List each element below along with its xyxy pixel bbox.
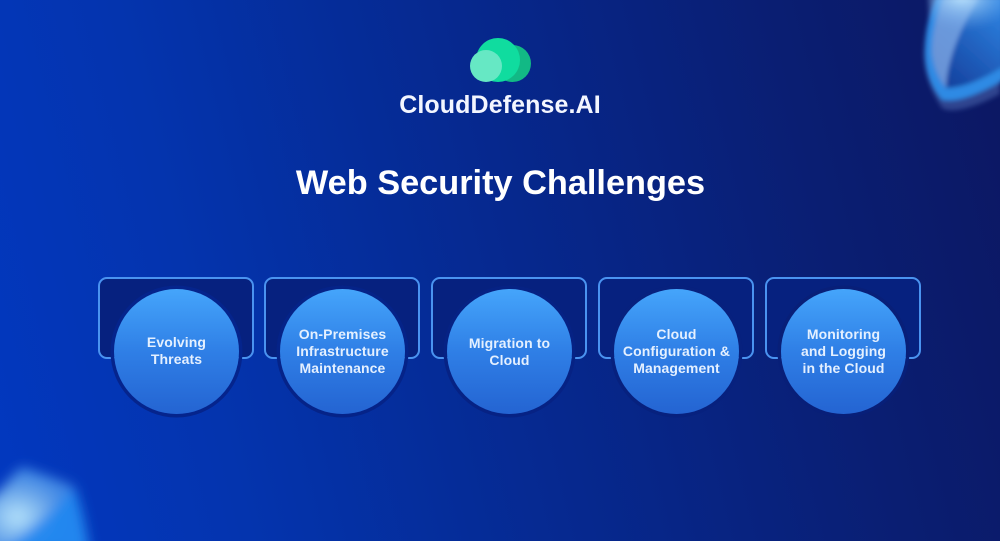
circle label [781,289,906,414]
circle label: Migration to [469,334,550,350]
icon: shield decoration top right [921,0,1000,112]
circle label [114,289,239,414]
icon: blurred shield decoration bottom left [0,462,96,541]
icon: green cloud [470,38,531,82]
logo wordmark: CloudDefense.AI [399,91,601,119]
circle label: in the Cloud [802,360,885,376]
circle label: Evolving [147,334,206,350]
title: Web Security Challenges [296,164,705,202]
circle label: Threats [151,350,202,366]
circle label [614,289,739,414]
circle label: Cloud [656,326,697,342]
circle label: Cloud [489,352,530,368]
card frame [264,277,420,359]
circle label: Maintenance [300,360,385,376]
logo: CloudDefense.AI [399,38,601,119]
circle label: On-Premises [299,326,386,342]
card frame [598,277,754,359]
circle label: Configuration & [623,343,730,359]
circle label: and Logging [801,343,886,359]
circle label [280,289,405,414]
circle label: Monitoring [807,326,880,342]
circle label: Infrastructure [296,343,389,359]
card frame [431,277,587,359]
card frame [765,277,921,359]
card frame [98,277,254,359]
circle label: Management [633,360,720,376]
circle label [447,289,572,414]
